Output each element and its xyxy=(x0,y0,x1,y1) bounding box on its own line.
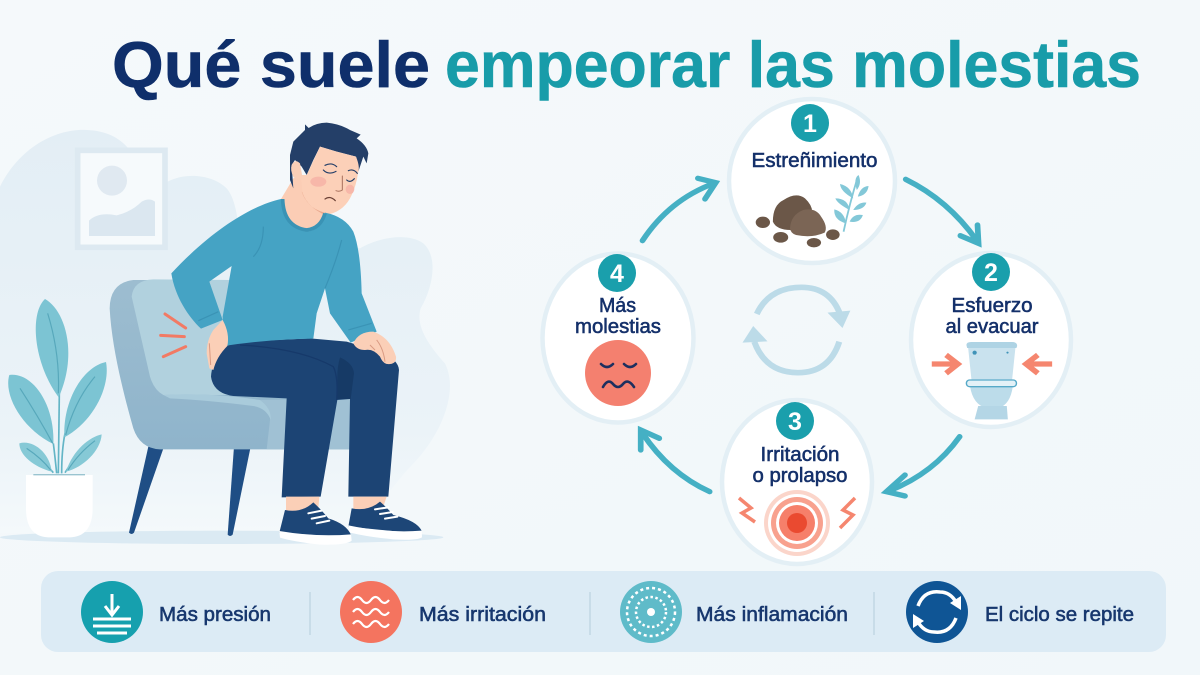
pain marks xyxy=(161,314,186,357)
circle 2: Esfuerzo al evacuar: 2 xyxy=(984,259,998,287)
item: Más inflamación: Más inflamación xyxy=(696,604,848,626)
circle 2: Esfuerzo al evacuar: Esfuerzo xyxy=(952,295,1032,317)
title xyxy=(112,28,1141,101)
trousers xyxy=(211,338,399,497)
title: empeorar las molestias xyxy=(445,28,1141,101)
icon: irritation waves xyxy=(340,581,402,643)
circle 3: Irritación o prolapso: Irritación xyxy=(760,444,840,466)
cycle diagram xyxy=(542,99,1071,564)
icon: toilet with pressure arrows xyxy=(932,342,1052,419)
circle 3: Irritación o prolapso xyxy=(722,400,872,564)
right shoe xyxy=(348,497,422,540)
background blob xyxy=(0,130,450,533)
title: Qué suele xyxy=(112,28,430,101)
icon: pressure xyxy=(81,581,143,643)
armchair xyxy=(110,279,351,536)
hand on hip xyxy=(207,320,228,370)
circle 2: Esfuerzo al evacuar xyxy=(911,253,1071,427)
circle 4: Más molestias: molestias xyxy=(575,316,661,338)
circle 2: Esfuerzo al evacuar: al evacuar xyxy=(946,316,1039,338)
icon: irritation target xyxy=(739,490,855,556)
circle 1: Estreñimiento: Estreñimiento xyxy=(752,150,878,172)
arrow: 3 to 4 xyxy=(641,430,710,492)
sweater xyxy=(171,199,377,346)
item: Más irritación: Más irritación xyxy=(419,604,546,626)
plant xyxy=(8,299,107,537)
circle 3: Irritación o prolapso: 3 xyxy=(788,408,802,436)
left shoe xyxy=(279,497,352,545)
circle 3: Irritación o prolapso: o prolapso xyxy=(752,465,848,487)
item: Más irritación xyxy=(340,581,546,643)
arrow: 1 to 2 xyxy=(906,179,979,243)
circle 4: Más molestias xyxy=(542,254,694,422)
center cycle arrows xyxy=(742,287,850,373)
icon: repeat cycle xyxy=(906,581,968,643)
item: Más presión xyxy=(81,581,271,643)
neck and head xyxy=(281,123,368,233)
wall picture xyxy=(78,150,165,247)
circle 1: Estreñimiento: 1 xyxy=(803,110,817,138)
icon: sad face xyxy=(585,340,651,406)
circle 1: Estreñimiento xyxy=(729,99,895,263)
item: Más inflamación xyxy=(620,581,848,643)
item: El ciclo se repite xyxy=(906,581,1134,643)
circle 4: Más molestias: Más xyxy=(599,295,636,317)
circle 4: Más molestias: 4 xyxy=(610,260,624,288)
floor shadow xyxy=(0,531,443,544)
item: Más presión: Más presión xyxy=(159,604,271,626)
arrow: 4 to 1 xyxy=(642,178,716,241)
arrow: 2 to 3 xyxy=(886,437,960,496)
item: El ciclo se repite: El ciclo se repite xyxy=(985,604,1134,626)
illustration: man with discomfort sitting on a chair xyxy=(0,123,450,545)
hand on knee xyxy=(353,332,396,364)
bottom strip xyxy=(41,571,1166,652)
icon: rocks and leaf xyxy=(756,175,869,247)
icon: inflammation rings xyxy=(620,581,682,643)
